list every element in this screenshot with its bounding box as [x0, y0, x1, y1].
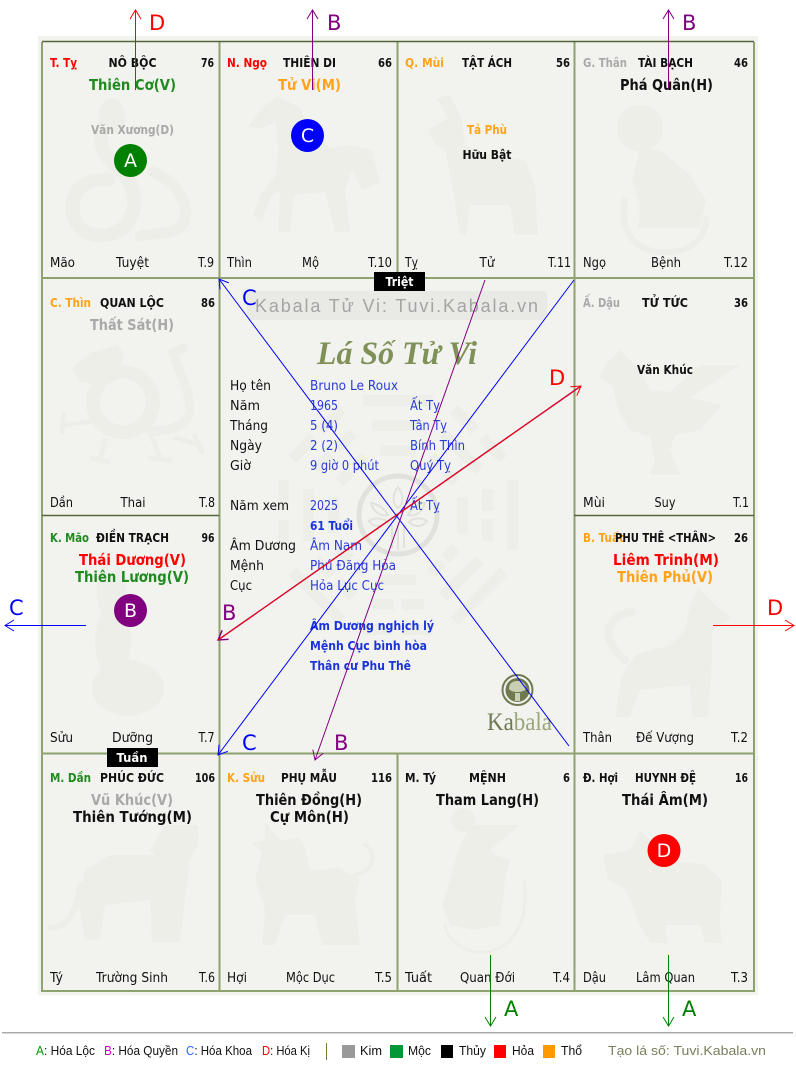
cell header: K. Mão [50, 530, 89, 545]
circle marker B: B [124, 600, 137, 622]
cell header [50, 295, 215, 310]
circle marker C [291, 119, 324, 152]
cell footer: T.8 [198, 496, 215, 511]
info labels: Năm xem [230, 499, 289, 514]
cell footer: T.7 [198, 731, 214, 746]
logo: Kabala [487, 675, 552, 736]
cell header: TỬ TỨC [642, 294, 688, 310]
cell header: M. Tý [405, 770, 436, 785]
cell header: 36 [734, 295, 748, 310]
cell header [50, 528, 215, 545]
main stars: Cự Môn(H) [270, 808, 349, 826]
info values: 1965 [310, 399, 338, 414]
arrow A bottom: A [504, 997, 519, 1021]
info labels: Mệnh [230, 559, 264, 574]
footer divider [2, 1032, 793, 1034]
icon: snake [72, 98, 186, 236]
cell footer: T.12 [723, 256, 748, 271]
notes: Mệnh Cục bình hòa [310, 638, 427, 653]
secondary stars [462, 122, 512, 162]
arrow A bottom [485, 955, 519, 1026]
info labels: Âm Dương [230, 538, 296, 554]
legend: elements: Mộc [408, 1044, 431, 1058]
arrow C upper diagonal [219, 279, 569, 746]
cell footer [404, 256, 571, 271]
cell header: THIÊN DI [283, 55, 336, 70]
arrow C left [5, 596, 86, 631]
cell footer: Tuyệt [115, 256, 149, 271]
icon: ox [252, 822, 373, 945]
arrow B top right [663, 10, 696, 90]
cell footer: Tý [49, 971, 63, 986]
info labels: Năm [230, 399, 260, 414]
cell footer: Tuất [404, 971, 432, 986]
cell header: C. Thìn [50, 295, 91, 310]
secondary star: Văn Xương(D) [91, 122, 174, 137]
can chi values [409, 397, 465, 514]
icon: dog [609, 587, 732, 717]
panel: Quan Lộc cell [50, 295, 215, 511]
cell header: G. Thân [583, 55, 627, 70]
main stars: Thiên Lương(V) [75, 568, 189, 586]
cell footer [227, 971, 392, 986]
cell header: NÔ BỘC [108, 55, 156, 70]
info labels: Tháng [229, 419, 268, 434]
can chi values: Quý Tỵ [410, 459, 451, 474]
info labels: Ngày [230, 439, 262, 454]
main star: Tử Vi(M) [278, 76, 341, 94]
cell footer: Dậu [583, 971, 606, 986]
arrow D top [130, 10, 165, 90]
legend: transformations: C: Hóa Khoa [186, 1044, 252, 1058]
personal info block [229, 379, 465, 673]
info values [310, 379, 398, 594]
panel: Tài Bạch cell [583, 55, 748, 271]
cell header: MỆNH [469, 770, 506, 785]
main star: Phá Quân(H) [620, 76, 713, 94]
legend: transformations: D: Hóa Kị [262, 1044, 310, 1058]
cell header: 116 [371, 770, 392, 785]
center bagua emblem [278, 395, 518, 635]
cell footer: T.4 [552, 971, 570, 986]
cell header: T. Tỵ [50, 55, 77, 70]
icon: goat [428, 95, 538, 235]
panel: Tật Ách cell [404, 55, 571, 271]
badge: Triệt: Triệt [386, 274, 414, 289]
cell footer: Mộc Dục [286, 971, 335, 986]
panel: Phúc Đức cell [49, 770, 215, 986]
circle marker D: D [657, 840, 671, 862]
cell footer: Lâm Quan [636, 971, 695, 986]
cell footer: T.2 [730, 731, 748, 746]
cell header: 46 [734, 55, 748, 70]
can chi values: Ất Tỵ [410, 497, 440, 514]
circle marker A [114, 144, 147, 177]
cell header: 86 [201, 295, 215, 310]
cell header: N. Ngọ [227, 55, 267, 70]
cell footer: Dưỡng [112, 731, 153, 746]
legend: elements: Kim [360, 1044, 382, 1058]
legend: elements [342, 1044, 582, 1058]
cell footer [404, 971, 570, 986]
cell header: Ấ. Dậu [583, 293, 620, 310]
icon: tiger [50, 825, 198, 942]
cell header [50, 55, 214, 70]
legend: transformations: A: Hóa Lộc [36, 1044, 95, 1058]
info labels: Cục [230, 579, 252, 594]
cell header: 56 [556, 55, 570, 70]
cell footer [583, 256, 748, 271]
notes: Âm Dương nghịch lý [310, 618, 434, 633]
icon: rat [442, 808, 525, 952]
cell header [227, 55, 392, 70]
credit: Tạo lá số: Tuvi.Kabala.vn [608, 1043, 766, 1058]
arrow B steep diagonal [313, 280, 485, 760]
main stars [73, 791, 192, 826]
cell footer: Thìn [226, 256, 252, 271]
info labels: Giờ [230, 459, 251, 474]
circle marker A: A [124, 150, 137, 172]
arrow D top: D [149, 11, 165, 35]
info values: 2 (2) [310, 439, 338, 454]
legend: transformations [36, 1044, 310, 1058]
cell header [405, 770, 570, 785]
secondary star: Văn Khúc [637, 362, 693, 377]
icon: monkey [617, 105, 706, 252]
cell header [583, 55, 748, 70]
cell header: 76 [201, 55, 214, 70]
grid lines [42, 42, 754, 991]
main stars: Thiên Đồng(H) [256, 790, 362, 809]
arrow C lower diagonal: C [242, 731, 257, 755]
cell footer: Hợi [227, 971, 247, 986]
cell header: K. Sửu [227, 770, 265, 785]
cell footer [49, 971, 215, 986]
logo: Kabala: Kabala [487, 709, 552, 736]
cell header: M. Dần [50, 770, 91, 785]
legend: elements: Thủy [459, 1044, 487, 1058]
cell header: Đ. Hợi [583, 770, 618, 785]
cell header: PHỤ MẪU [281, 769, 337, 785]
cell footer: Thân [582, 731, 612, 746]
cell footer: Mùi [583, 496, 605, 511]
can chi values: Tân Tỵ [409, 419, 447, 434]
cell footer: Tỵ [404, 256, 418, 271]
arrow B steep diagonal: B [334, 731, 348, 755]
cell footer [226, 256, 392, 271]
cell footer [583, 971, 748, 986]
cell header: TẬT ÁCH [462, 55, 512, 70]
main stars [75, 551, 189, 586]
legend: transformations: B: Hóa Quyền [104, 1044, 178, 1058]
cell footer: Thai [120, 496, 146, 511]
arrow B top: B [327, 11, 341, 35]
cell header: TÀI BẠCH [638, 55, 693, 70]
info values: Phú Đăng Hỏa [310, 559, 396, 574]
panel: Nô Bộc cell [50, 55, 214, 271]
cell footer: Mộ [302, 256, 319, 271]
secondary stars: Hữu Bật [462, 147, 512, 162]
panel: Phu Thê cell [582, 530, 748, 746]
arrow A bottom right [663, 955, 697, 1026]
cell header: QUAN LỘC [100, 295, 164, 310]
info labels [229, 379, 296, 594]
secondary stars: Tả Phù [467, 122, 507, 137]
notes [310, 618, 434, 673]
cell footer: Quan Đới [460, 971, 515, 986]
cell header: 96 [202, 530, 215, 545]
arrow B top [307, 10, 341, 90]
cell header: 16 [735, 770, 748, 785]
cell footer [582, 731, 748, 746]
cell header [583, 770, 748, 785]
panel: Điền Trạch cell [50, 528, 215, 746]
main stars: Liêm Trinh(M) [613, 551, 719, 569]
cell header: PHÚC ĐỨC [100, 770, 164, 785]
arrow C upper diagonal: C [242, 286, 257, 310]
main stars: Thái Dương(V) [79, 551, 186, 569]
arrow B top right: B [682, 11, 696, 35]
info values: 9 giờ 0 phút [310, 459, 379, 474]
main stars [256, 790, 362, 826]
arrow C left: C [9, 596, 24, 620]
info values: Hỏa Lục Cục [310, 579, 384, 594]
icon: rabbit [92, 565, 164, 716]
cell header: 106 [195, 770, 215, 785]
legend: elements: Thổ [561, 1044, 582, 1058]
cell footer: Tử [479, 256, 495, 271]
main stars [613, 551, 719, 586]
panel: Thiên Di cell [226, 55, 392, 271]
info values: Âm Nam [310, 538, 362, 554]
arrow B long diagonal [218, 386, 581, 640]
cell footer: Sửu [50, 731, 73, 746]
legend divider [326, 1043, 327, 1060]
heading: Lá Số Tử Vi: Lá Số Tử Vi [316, 336, 478, 372]
badge: Tuần: Tuần [116, 750, 148, 765]
arrow C lower diagonal [218, 280, 574, 755]
icon: rooster [600, 350, 740, 475]
info values: 61 Tuổi [310, 518, 353, 533]
circle marker D [648, 834, 680, 867]
badge: Tuần [107, 748, 158, 767]
cell footer: T.5 [374, 971, 392, 986]
cell footer: T.6 [198, 971, 215, 986]
cell header [227, 769, 392, 785]
info values: 2025 [310, 499, 338, 514]
main star: Thái Âm(M) [622, 790, 708, 809]
arrow B long diagonal: B [222, 601, 236, 625]
panel: Huynh Đệ cell [583, 770, 748, 986]
panel: Tử Tức cell [583, 293, 749, 511]
cell header: 26 [734, 530, 748, 545]
main stars: Vũ Khúc(V) [91, 791, 173, 809]
info values: Bruno Le Roux [310, 379, 398, 394]
arrow A bottom right: A [682, 997, 697, 1021]
can chi values: Bính Thìn [410, 439, 465, 454]
can chi values: Ất Tỵ [410, 397, 440, 414]
panel: Mệnh cell [404, 770, 570, 986]
arrow D right: D [767, 596, 783, 620]
main star: Thiên Cơ(V) [89, 76, 176, 94]
arrow D right [713, 596, 794, 631]
arrow D long diagonal: D [549, 366, 565, 390]
cell header [50, 770, 215, 785]
cell footer: Ngọ [583, 256, 606, 271]
cell footer: Trường Sinh [95, 971, 168, 986]
cell footer [50, 256, 214, 271]
cell footer: T.9 [197, 256, 214, 271]
title band: Kabala Tử Vi [247, 291, 547, 320]
arrow D long diagonal [218, 366, 581, 640]
cell header [583, 293, 748, 310]
cell header: B. Tuất [583, 530, 624, 545]
cell header: ĐIỀN TRẠCH [96, 528, 169, 545]
cell header: 66 [378, 55, 392, 70]
circle marker B [114, 594, 147, 627]
main star: Thất Sát(H) [90, 316, 174, 334]
cell footer: T.3 [730, 971, 748, 986]
cell header: 6 [563, 770, 570, 785]
main stars: Thiên Phủ(V) [617, 568, 713, 586]
icon: horse [248, 96, 380, 232]
info labels: Họ tên [230, 379, 271, 394]
panel: Phụ Mẫu cell [227, 769, 392, 986]
cell footer: Bệnh [651, 256, 681, 271]
cell footer [50, 731, 214, 746]
cell header [405, 55, 570, 70]
cell footer [50, 496, 215, 511]
cell header: PHU THÊ <THÂN> [615, 530, 716, 545]
icon: dragon [62, 345, 202, 462]
cell footer: T.10 [367, 256, 392, 271]
cell header: Q. Mùi [405, 55, 444, 70]
cell footer: Dần [50, 496, 73, 511]
cell header: HUYNH ĐỆ [635, 770, 696, 785]
badge: Triệt [374, 272, 425, 291]
icon: pig [603, 830, 722, 943]
cell footer: T.1 [732, 496, 749, 511]
main stars: Thiên Tướng(M) [73, 808, 192, 826]
cell footer: Đế Vượng [636, 731, 694, 746]
cell footer: T.11 [547, 256, 571, 271]
cell footer: Mão [50, 256, 75, 271]
circle marker C: C [301, 125, 314, 147]
main star: Tham Lang(H) [436, 791, 539, 809]
notes: Thân cư Phu Thê [310, 658, 411, 673]
cell footer [583, 496, 749, 511]
title band: Kabala Tử Vi: Kabala Tử Vi: Tuvi.Kabala.vn [255, 296, 538, 316]
info values: 5 (4) [310, 419, 338, 434]
legend: elements: Hỏa [512, 1044, 534, 1058]
cell footer: Suy [654, 496, 676, 511]
